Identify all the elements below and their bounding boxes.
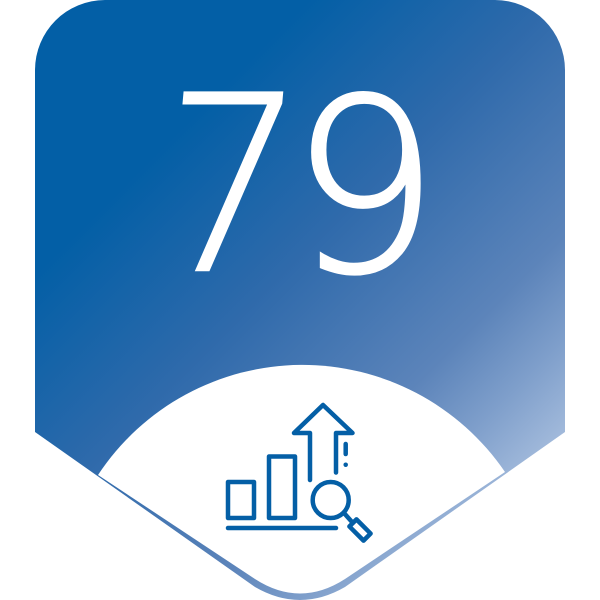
number 79: 9 [290,48,439,327]
number 79 [147,46,439,327]
white arc cap [98,365,505,594]
icon: baseline [228,526,336,530]
number 79: 7 [147,46,310,327]
icon: bar chart with up arrow and magnifier [228,405,371,541]
icon: exclamation mark [343,444,348,465]
icon: tall bar [269,456,295,518]
icon: up arrow [294,405,352,480]
icon: short bar [228,482,254,518]
icon: magnifying glass [313,482,371,541]
